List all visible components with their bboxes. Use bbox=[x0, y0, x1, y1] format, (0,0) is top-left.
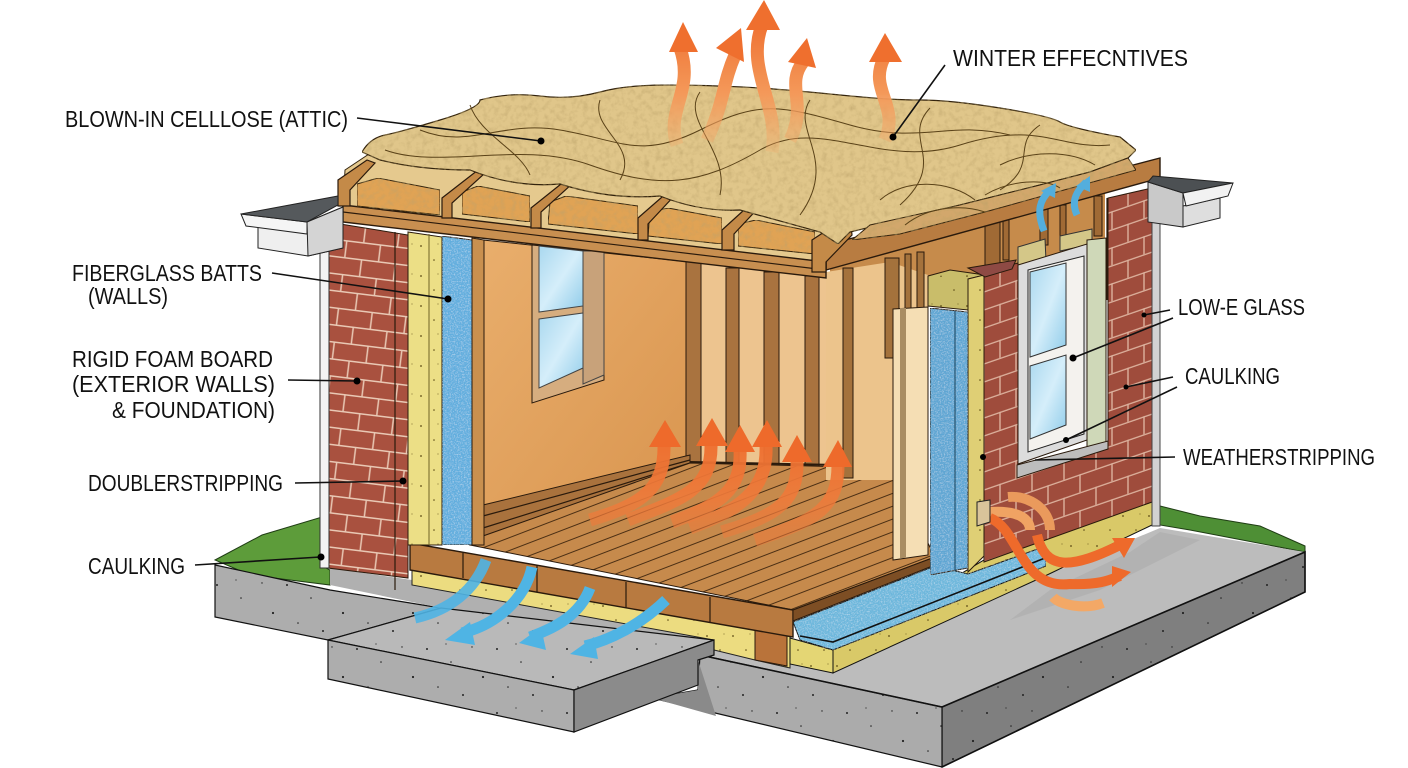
label: caulking left bbox=[88, 553, 324, 579]
label: caulking right bbox=[1063, 363, 1280, 443]
label: fiberglass batts bbox=[72, 260, 452, 309]
grass: right bbox=[1160, 506, 1305, 552]
roof: right beam bbox=[826, 158, 1160, 270]
left wall: white corner trim bbox=[320, 250, 329, 568]
left wall: yellow batt bbox=[408, 232, 442, 545]
floor: front beam bbox=[410, 543, 935, 637]
arrows: heat escaping through roof bbox=[669, 0, 902, 152]
right wall: cream trim board bbox=[893, 307, 928, 560]
arrows: air leak through wall base bbox=[990, 497, 1135, 606]
label: low-e glass bbox=[1070, 294, 1305, 362]
right wall: yellow foam bbox=[928, 270, 985, 572]
label: weatherstripping bbox=[980, 444, 1375, 470]
arrows: cold air at top of right wall bbox=[1040, 176, 1090, 231]
left gutter box bbox=[241, 196, 343, 256]
label: winter effectiveness: WINTER EFFECNTIVES bbox=[953, 45, 1188, 71]
label: low-e glass: LOW-E GLASS bbox=[1178, 294, 1305, 320]
concrete entry step bbox=[328, 608, 714, 732]
label: blown-in cellulose bbox=[65, 106, 544, 144]
right window bbox=[1017, 238, 1108, 478]
label: caulking left: CAULKING bbox=[88, 553, 185, 579]
foundation blue foam bbox=[793, 546, 1046, 650]
icon: wall vent bbox=[977, 500, 990, 526]
arrows: cold air under floor bbox=[415, 560, 666, 659]
label: doublerstripping: DOUBLERSTRIPPING bbox=[88, 470, 283, 496]
roof: rafters bbox=[338, 160, 852, 272]
left wall: brick bbox=[328, 222, 408, 590]
foundation yellow foam bbox=[790, 502, 1152, 673]
right wall: studs near door bbox=[826, 252, 928, 480]
interior: back window bbox=[532, 245, 604, 403]
right gutter box bbox=[1148, 176, 1233, 227]
grass: left bbox=[215, 517, 330, 585]
label: blown-in cellulose: BLOWN-IN CELLLOSE (ATTIC) bbox=[65, 106, 348, 132]
right wall: upper framing bbox=[830, 190, 1105, 300]
concrete foundation: left slab bbox=[215, 565, 714, 640]
roof: blown-in cellulose mound bbox=[362, 85, 1136, 244]
floor: wood deck bbox=[470, 463, 935, 610]
concrete foundation: right slab bbox=[640, 528, 1305, 767]
arrows: heat rising from floor bbox=[590, 418, 852, 540]
label: rigid foam board: & FOUNDATION) bbox=[112, 397, 275, 423]
label: fiberglass batts: FIBERGLASS BATTS bbox=[72, 260, 262, 286]
right wall: blue foam bbox=[930, 308, 968, 575]
label: rigid foam board: RIGID FOAM BOARD bbox=[72, 346, 273, 372]
right wall: brick bbox=[968, 188, 1152, 562]
roof: front beam bbox=[343, 205, 826, 278]
left wall: stud bbox=[472, 238, 484, 545]
label: caulking right: CAULKING bbox=[1185, 363, 1280, 389]
interior: back wall orange bbox=[483, 240, 690, 510]
interior: left baseboard bbox=[483, 455, 690, 545]
roof: orange batt sections between rafters bbox=[357, 178, 815, 254]
right wall: corner trim bbox=[1152, 222, 1160, 526]
label: rigid foam board: (EXTERIOR WALLS) bbox=[72, 371, 275, 397]
floor framing and yellow sill bbox=[412, 566, 790, 668]
roof: batt backing bbox=[343, 150, 840, 262]
label: fiberglass batts: (WALLS) bbox=[88, 283, 168, 309]
left wall: blue foam bbox=[442, 236, 472, 545]
interior: wall studs bbox=[686, 262, 895, 475]
label: winter effectiveness bbox=[890, 45, 1188, 140]
label: rigid foam board bbox=[72, 346, 360, 423]
